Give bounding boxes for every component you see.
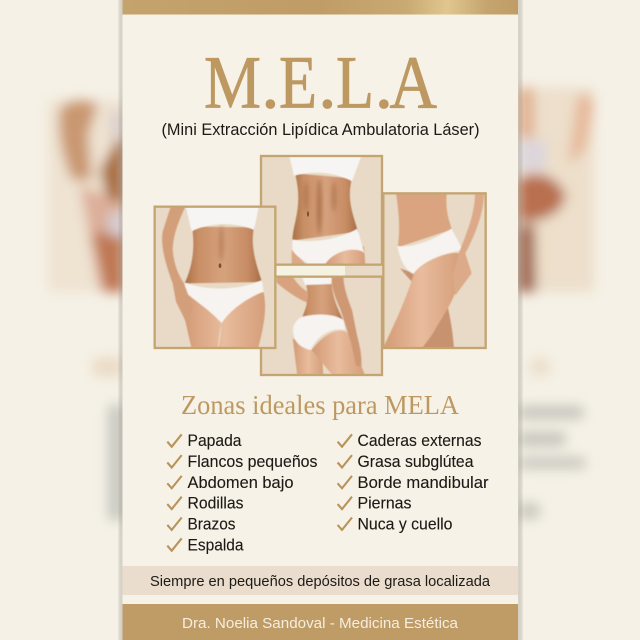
note strip: Siempre en pequeños depósitos de grasa localizada	[150, 573, 491, 590]
checklist: left column: Abdomen bajo	[188, 474, 294, 492]
checklist: right column: Caderas externas	[358, 432, 482, 450]
title: .	[374, 42, 393, 124]
title: .	[318, 42, 337, 124]
checklist: left column: Papada	[188, 432, 242, 450]
title: L	[336, 42, 374, 124]
panel: poster	[122, 0, 518, 640]
note strip	[122, 566, 518, 595]
photo: front torso	[154, 206, 276, 349]
photo: side view	[383, 193, 486, 349]
footer bar: Dra. Noelia Sandoval - Medicina Estética	[182, 615, 459, 632]
checklist: right column: Piernas	[358, 494, 412, 512]
checklist: left column: Rodillas	[188, 494, 244, 512]
photo: top torso	[261, 156, 382, 265]
checklist: left column: Flancos pequeños	[188, 453, 318, 471]
title: .	[261, 42, 280, 124]
subtitle: (Mini Extracción Lipídica Ambulatoria Láser)	[162, 121, 480, 139]
checklist: right column	[338, 432, 489, 534]
title: E	[279, 42, 317, 124]
checklist: right column: Grasa subglútea	[358, 453, 474, 471]
gap strip between photos	[345, 265, 383, 277]
heading: zonas ideales: Zonas ideales para MELA	[181, 390, 459, 420]
checklist: left column	[167, 432, 318, 554]
photo collage	[154, 156, 486, 375]
top gold bar	[122, 0, 518, 14]
photo: back view	[261, 277, 382, 375]
checklist: left column: Espalda	[188, 536, 244, 554]
title: M	[204, 42, 261, 124]
title	[204, 42, 437, 124]
checklist: right column: Nuca y cuello	[358, 516, 452, 534]
checklist: left column: Brazos	[188, 516, 236, 534]
checklist: right column: Borde mandibular	[358, 474, 489, 492]
cream gap	[277, 266, 345, 275]
title: A	[390, 42, 437, 124]
footer bar	[122, 604, 518, 640]
